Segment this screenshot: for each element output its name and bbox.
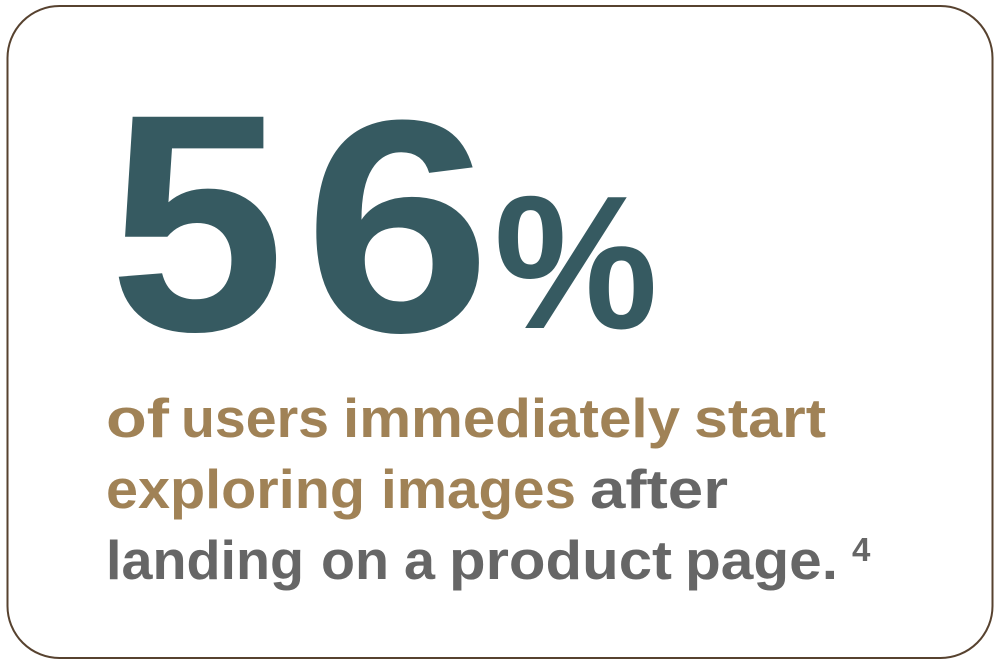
- line 3: landing: [106, 529, 304, 591]
- line 2: [106, 458, 728, 520]
- big number: 56: 5: [109, 51, 285, 396]
- line 2: after: [590, 458, 728, 520]
- line 1: immediately: [343, 387, 680, 449]
- percent sign: %: [494, 156, 658, 369]
- line 1: users: [181, 387, 329, 449]
- line 2: exploring: [106, 458, 365, 520]
- line 3: a: [404, 529, 435, 591]
- line 3: on: [321, 529, 389, 591]
- line 1: of: [106, 387, 170, 449]
- big number: 56: [109, 51, 491, 396]
- line 3: [106, 529, 838, 591]
- line 2: images: [381, 458, 576, 520]
- line 3: page.: [685, 529, 838, 591]
- big number: 56: 6: [304, 56, 491, 395]
- line 3: product: [449, 529, 672, 591]
- footnote marker: 4: [852, 531, 871, 568]
- line 1: [106, 387, 826, 449]
- description text: [106, 387, 838, 591]
- line 1: start: [694, 387, 826, 449]
